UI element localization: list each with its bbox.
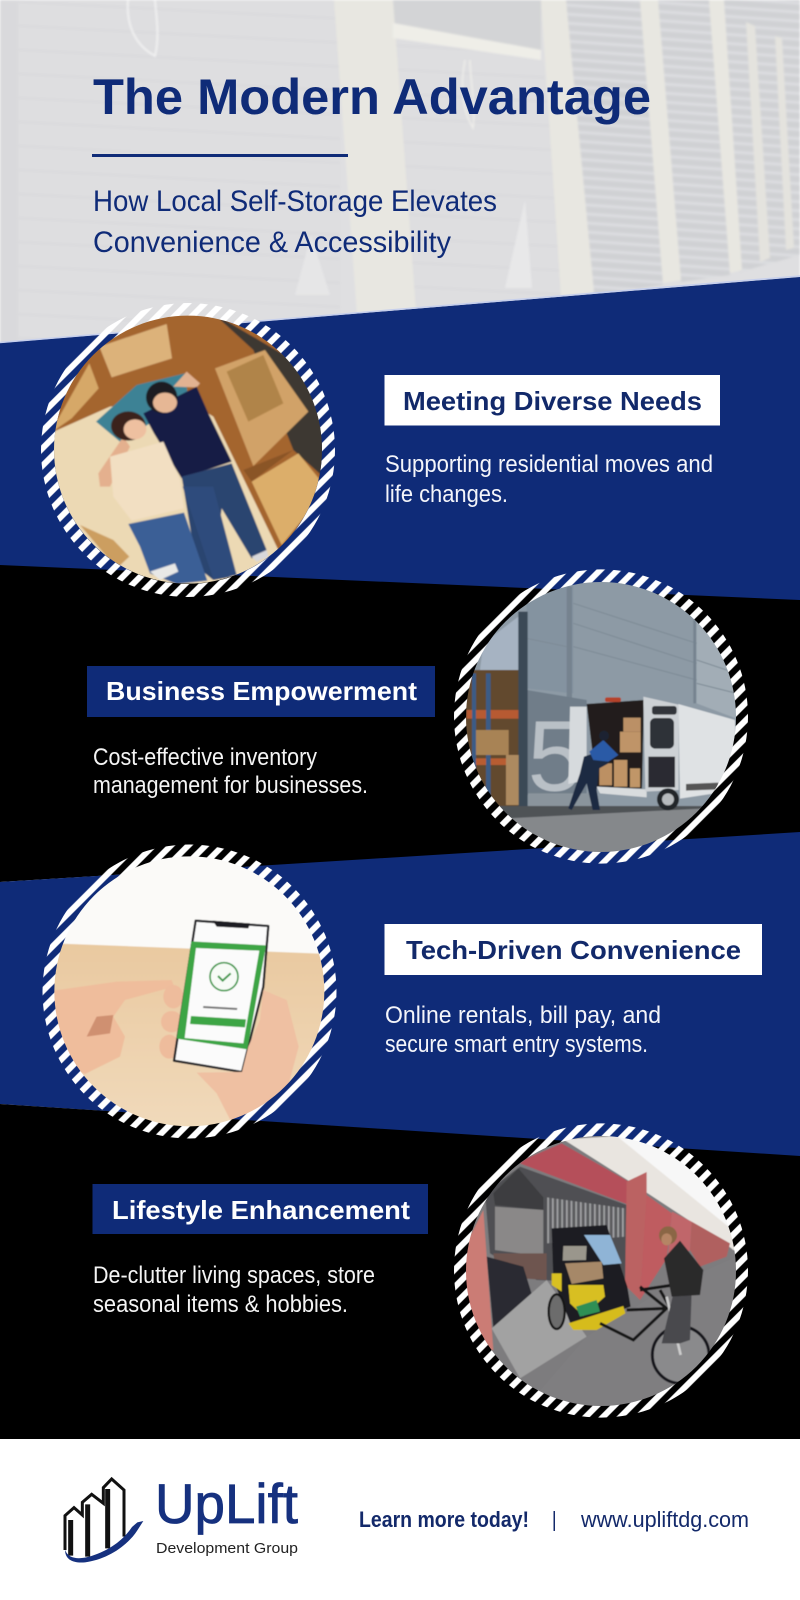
photo circle 1: couple with moving boxes bbox=[41, 303, 335, 597]
photo circle 2: van at warehouse: 5 bbox=[528, 701, 583, 813]
subtitle bbox=[93, 185, 497, 259]
band edge highlight bbox=[0, 276, 800, 342]
title underline bbox=[92, 154, 348, 157]
band: black section one bbox=[0, 565, 800, 882]
card 2 text bbox=[93, 744, 368, 799]
footer background bbox=[0, 1439, 800, 1600]
footer call to action: Learn more today! bbox=[359, 1507, 529, 1532]
card 1 text: life changes. bbox=[385, 481, 508, 508]
band: blue section one bbox=[0, 277, 800, 601]
card 1 text: Supporting residential moves and bbox=[385, 451, 713, 478]
card 2 text: Cost-effective inventory bbox=[93, 744, 317, 771]
footer separator bbox=[554, 1511, 555, 1531]
card 2 heading bbox=[87, 666, 435, 717]
title: The Modern Advantage bbox=[93, 69, 651, 125]
card 4 text bbox=[93, 1262, 375, 1318]
card 2 text: management for businesses. bbox=[93, 772, 368, 799]
card 2 heading: Business Empowerment bbox=[106, 676, 417, 706]
header background photo: storage doors bbox=[0, 0, 800, 350]
card 4 text: De-clutter living spaces, store bbox=[93, 1262, 375, 1289]
logo wordmark: UpLift bbox=[155, 1472, 298, 1535]
subtitle: How Local Self-Storage Elevates bbox=[93, 185, 497, 218]
card 1 heading bbox=[384, 375, 720, 426]
logo: UpLift Development Group bbox=[65, 1472, 298, 1563]
card 3 heading bbox=[384, 924, 762, 975]
card 3 heading: Tech-Driven Convenience bbox=[406, 935, 741, 965]
card 3 text: secure smart entry systems. bbox=[385, 1031, 648, 1058]
footer url: www.upliftdg.com bbox=[580, 1507, 749, 1532]
card 3 text bbox=[385, 1002, 661, 1058]
card 3 text: Online rentals, bill pay, and bbox=[385, 1002, 661, 1029]
logo icon: buildings and arrow bbox=[65, 1479, 143, 1563]
band: black section two bbox=[0, 1104, 800, 1439]
band: blue section two bbox=[0, 832, 800, 1157]
card 1 text bbox=[385, 451, 713, 508]
photo circle 3: phone app bbox=[42, 844, 336, 1138]
photo circle 2: van at warehouse bbox=[454, 569, 748, 864]
card 4 heading bbox=[92, 1184, 428, 1234]
subtitle: Convenience & Accessibility bbox=[93, 226, 451, 259]
card 4 heading: Lifestyle Enhancement bbox=[112, 1195, 410, 1225]
photo circle 4: bike at storage unit bbox=[454, 1123, 748, 1418]
card 1 heading: Meeting Diverse Needs bbox=[403, 386, 702, 416]
card 4 text: seasonal items & hobbies. bbox=[93, 1291, 348, 1318]
logo tagline: Development Group bbox=[156, 1540, 298, 1557]
